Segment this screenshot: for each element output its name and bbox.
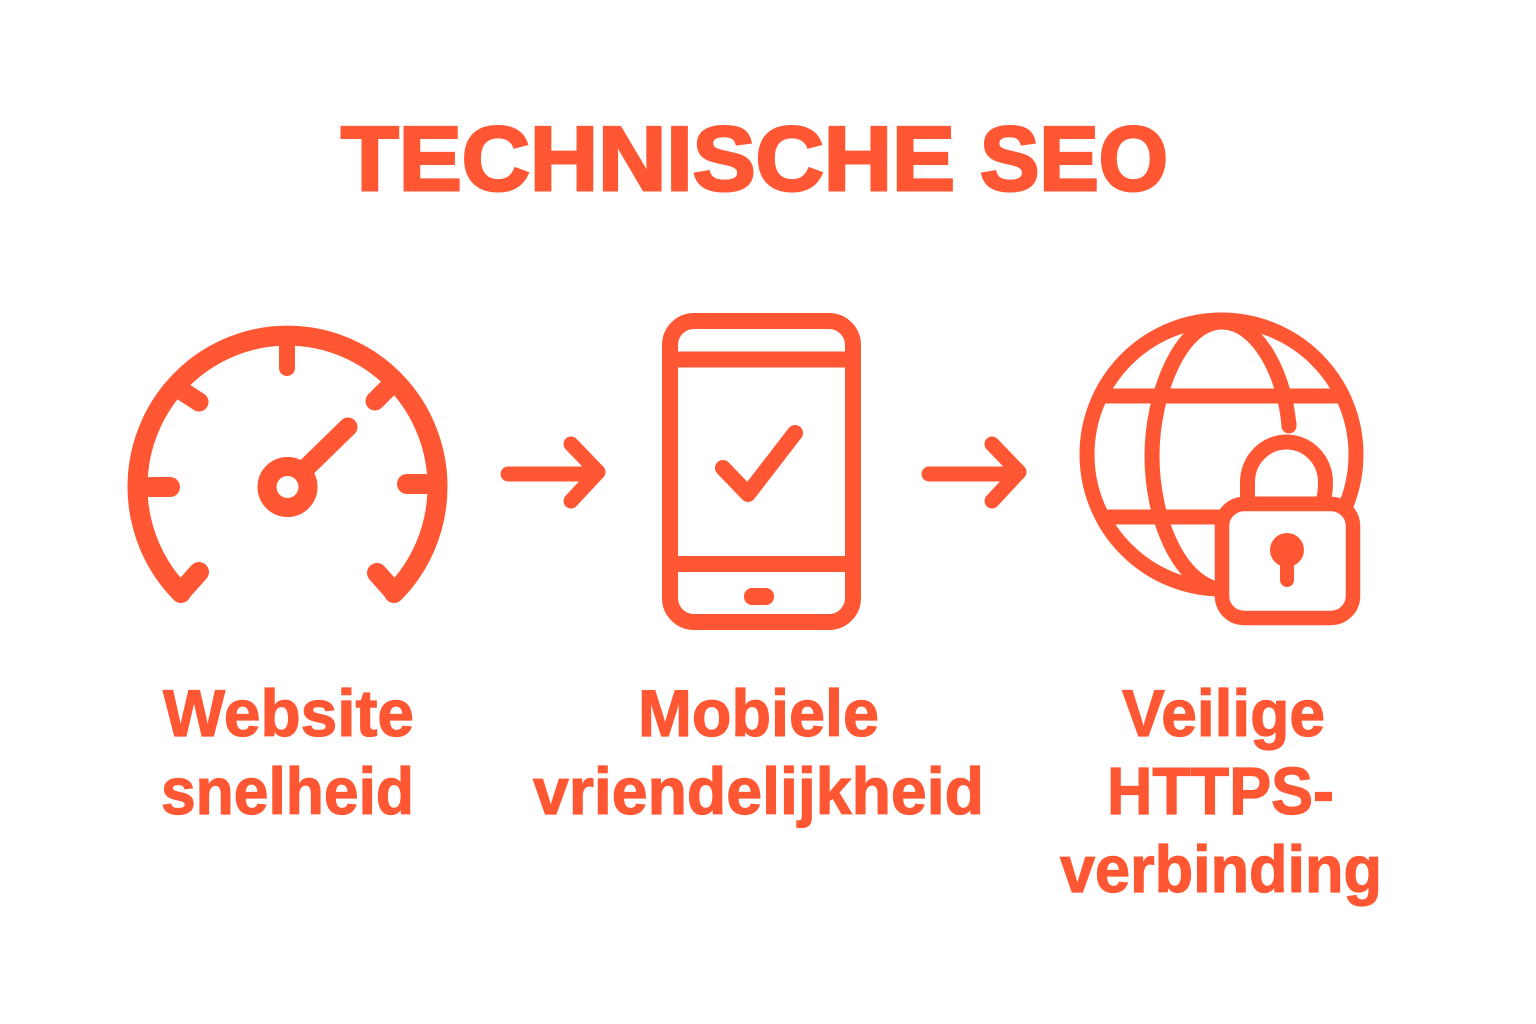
label: veilige https-verbinding: verbinding <box>1060 832 1382 906</box>
label: veilige https-verbinding: Veilige <box>1122 676 1325 750</box>
label: veilige https-verbinding: HTTPS- <box>1107 754 1334 829</box>
keyhole <box>1270 533 1304 587</box>
title: SEO <box>980 109 1168 210</box>
arrow: speed to mobile <box>508 444 598 501</box>
padlock shackle <box>1248 442 1326 504</box>
icon: smartphone with check mark <box>670 321 853 622</box>
label: mobiele vriendelijkheid: vriendelijkheid <box>533 754 984 828</box>
padlock body <box>1222 504 1353 618</box>
label: website snelheid: Website <box>163 676 414 750</box>
icon: globe with padlock <box>1087 320 1356 618</box>
label: website snelheid: snelheid <box>161 754 414 828</box>
label: website snelheid <box>161 676 414 828</box>
arrow: mobile to secure <box>929 444 1019 501</box>
title: TECHNISCHE <box>341 109 955 210</box>
label: mobiele vriendelijkheid <box>533 676 984 828</box>
label: veilige https-verbinding <box>1060 676 1382 906</box>
icon: speedometer gauge <box>138 336 438 593</box>
label: mobiele vriendelijkheid: Mobiele <box>638 676 879 750</box>
